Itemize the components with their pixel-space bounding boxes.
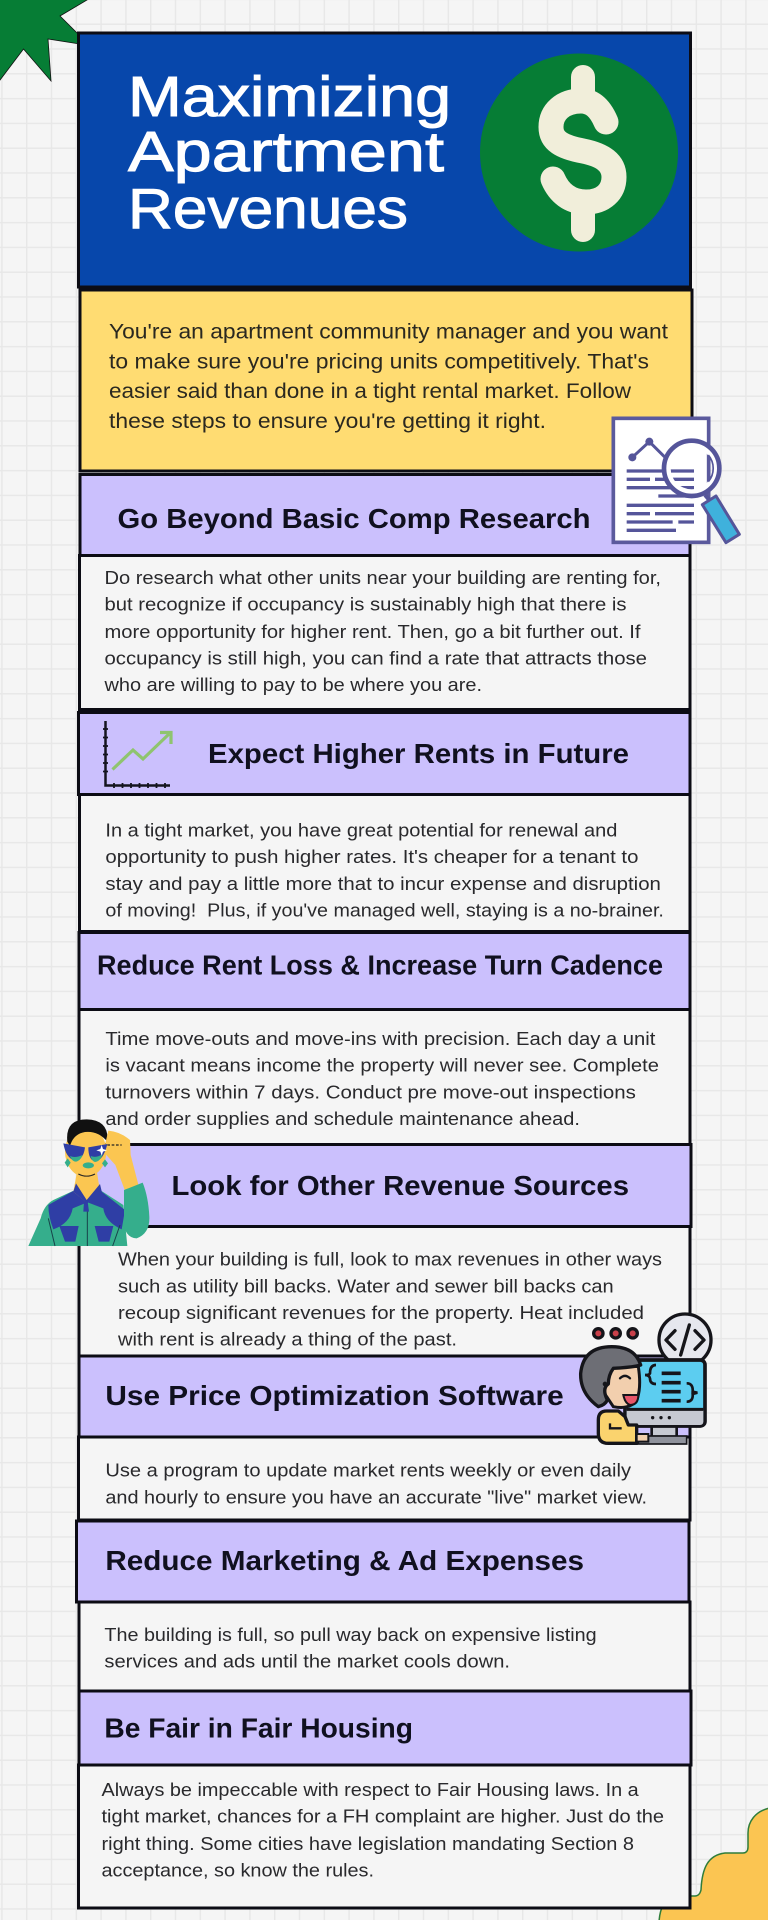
panel: look for other revenue sources: [79, 1144, 691, 1356]
body text: Time move-outs and move-ins with precision. Each day a unit: [105, 1028, 656, 1049]
heading: Look for Other Revenue Sources: [172, 1170, 629, 1201]
body text: turnovers within 7 days. Conduct pre move-out inspections: [105, 1082, 636, 1102]
intro text: to make sure you're pricing units competitively. That's: [109, 350, 649, 374]
title: Maximizing: [128, 65, 451, 129]
body text: [105, 1460, 647, 1507]
heading: Go Beyond Basic Comp Research: [118, 503, 590, 534]
body text: and hourly to ensure you have an accurate "live" market view.: [105, 1486, 647, 1507]
title: [128, 65, 451, 241]
title: Revenues: [128, 177, 408, 241]
icon: document with magnifying glass: [613, 418, 739, 543]
icon: dollar coin: [480, 54, 678, 252]
body text: [103, 567, 661, 695]
body text: When your building is full, look to max revenues in other ways: [118, 1249, 662, 1270]
body text: services and ads until the market cools down.: [104, 1651, 510, 1672]
decorative yellow wavy blob: [659, 1808, 768, 1920]
body text: such as utility bill backs. Water and sewer bill backs can: [118, 1275, 614, 1296]
body text: [104, 1624, 597, 1672]
body text: Always be impeccable with respect to Fair Housing laws. In a: [102, 1779, 639, 1800]
body text: with rent is already a thing of the past.: [117, 1329, 457, 1350]
heading: Reduce Rent Loss & Increase Turn Cadence: [97, 950, 663, 980]
icon: developer at computer: [581, 1314, 711, 1444]
heading: Use Price Optimization Software: [105, 1380, 564, 1411]
heading: Expect Higher Rents in Future: [208, 738, 629, 769]
body text: acceptance, so know the rules.: [102, 1860, 374, 1881]
intro text: You're an apartment community manager and you want: [109, 320, 668, 344]
panel: be fair in fair housing: [78, 1691, 691, 1908]
body text: but recognize if occupancy is sustainably high that there is: [104, 594, 626, 614]
body text: of moving! Plus, if you've managed well, staying is a no-brainer.: [105, 900, 664, 921]
body text: [105, 1028, 659, 1129]
body text: tight market, chances for a FH complaint are higher. Just do the: [102, 1806, 664, 1827]
heading: Reduce Marketing & Ad Expenses: [105, 1545, 584, 1576]
icon: woman adjusting sunglasses: [28, 1119, 149, 1246]
intro text: easier said than done in a tight rental market. Follow: [109, 379, 631, 403]
body text: right thing. Some cities have legislation mandating Section 8: [102, 1833, 634, 1854]
panel: expect higher rents in future: [78, 712, 690, 932]
body text: is vacant means income the property will never see. Complete: [105, 1055, 659, 1076]
body text: The building is full, so pull way back on expensive listing: [104, 1624, 597, 1645]
body text: Do research what other units near your building are renting for,: [104, 567, 661, 588]
body text: [102, 1779, 664, 1881]
intro text: these steps to ensure you're getting it right.: [109, 409, 546, 433]
body text: opportunity to push higher rates. It's cheaper for a tenant to: [105, 846, 638, 867]
body text: and order supplies and schedule maintenance ahead.: [105, 1108, 580, 1129]
panel: reduce rent loss and increase turn cadence: [79, 932, 690, 1144]
icon: rising line chart: [103, 721, 171, 788]
heading: Be Fair in Fair Housing: [104, 1713, 413, 1744]
panel: intro: [80, 290, 692, 471]
body text: Use a program to update market rents weekly or even daily: [105, 1460, 632, 1481]
panel: use price optimization software: [78, 1356, 690, 1520]
body text: who are willing to pay to be where you are.: [103, 674, 482, 695]
body text: occupancy is still high, you can find a rate that attracts those: [104, 648, 647, 668]
body text: In a tight market, you have great potential for renewal and: [105, 819, 617, 840]
body text: [117, 1249, 662, 1350]
body text: recoup significant revenues for the property. Heat included: [118, 1302, 644, 1323]
body text: stay and pay a little more that to incur expense and disruption: [105, 873, 661, 894]
decorative green starburst: [0, 0, 92, 84]
title: Apartment: [128, 120, 444, 184]
body text: [105, 819, 664, 921]
panel: go beyond basic comp research: [80, 474, 690, 710]
panel: reduce marketing and ad expenses: [76, 1521, 690, 1691]
body text: more opportunity for higher rent. Then, go a bit further out. If: [104, 621, 641, 642]
panel: title header: [78, 33, 690, 287]
intro text: [109, 320, 668, 433]
